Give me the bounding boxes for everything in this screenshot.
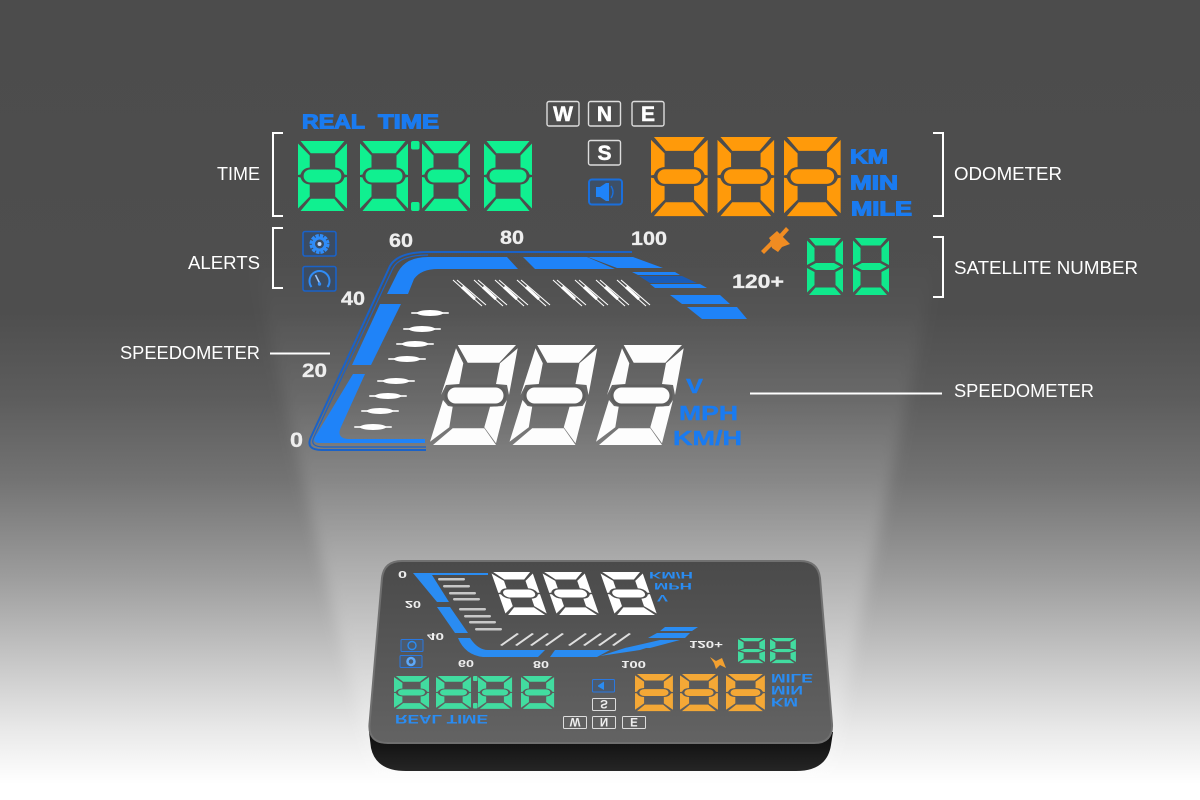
odometer units small: MIN [771, 683, 803, 695]
time digits small [394, 676, 554, 709]
speed digits small [491, 572, 657, 615]
projected light beam [250, 250, 940, 780]
scale numbers small: 40 [427, 630, 444, 642]
compass small [564, 697, 646, 728]
icon: speaker [589, 180, 622, 204]
leader line: speedometer right [750, 392, 942, 394]
speed units small: KM/H [649, 569, 693, 580]
scale numbers small: 80 [533, 658, 549, 670]
compass small: E [630, 715, 638, 727]
satellite digits [807, 238, 889, 295]
label: SPEEDOMETER right: SPEEDOMETER [954, 381, 1094, 401]
compass small: W [570, 715, 581, 727]
speed scale numbers: 0 [290, 429, 303, 452]
time digits [298, 141, 532, 211]
speed gauge arc [309, 252, 747, 450]
compass small: S [600, 697, 608, 709]
satellite icon small [710, 657, 726, 669]
alert icons small [400, 640, 423, 668]
compass: W N E S: S [597, 142, 612, 165]
label: ODOMETER: ODOMETER [954, 164, 1062, 184]
satellite digits small [738, 638, 796, 663]
compass small: N [600, 715, 608, 727]
compass: W N E S: N [597, 103, 612, 126]
compass: W N E S: E [641, 103, 655, 126]
speed scale numbers: 100 [631, 229, 667, 250]
gauge small [413, 573, 698, 657]
speed units: KM/H [673, 428, 742, 450]
horizontal tick needles [354, 310, 449, 430]
speed units: MPH [679, 403, 738, 425]
bracket: alerts [273, 228, 283, 288]
diagonal tick needles [453, 280, 650, 306]
label: SPEEDOMETER left: SPEEDOMETER [120, 343, 260, 363]
bracket: odometer [933, 133, 943, 216]
speed units small [649, 569, 693, 603]
speed units: V [686, 376, 704, 398]
REAL TIME heading: TIME [378, 112, 439, 134]
scale numbers small: 60 [458, 657, 474, 669]
odometer digits [651, 137, 841, 216]
odometer units: MIN [850, 172, 898, 194]
device face [369, 561, 832, 743]
diagonal ticks small [500, 633, 631, 646]
device body [369, 732, 833, 771]
device: HUD unit [369, 561, 833, 771]
leader line: speedometer left [270, 352, 330, 354]
speed units [673, 376, 742, 450]
compass: W N E S [547, 102, 664, 165]
icon: gear alert [303, 232, 336, 256]
scale numbers small [398, 568, 723, 670]
speed scale numbers: 60 [389, 231, 413, 252]
odometer units: MILE [851, 198, 912, 220]
odometer units small: KM [771, 695, 798, 707]
REAL TIME heading [302, 112, 439, 134]
icon: satellite [761, 227, 790, 254]
speaker icon small [592, 680, 614, 692]
bracket: time [273, 133, 283, 216]
speed scale numbers: 80 [500, 228, 524, 249]
speed scale numbers: 40 [341, 289, 365, 310]
scale numbers small: 100 [621, 658, 646, 670]
scale numbers small: 0 [398, 568, 407, 580]
HUD projection [290, 102, 912, 452]
label: SATELLITE NUMBER: SATELLITE NUMBER [954, 258, 1138, 278]
odometer units [850, 146, 912, 220]
REAL TIME small: REAL TIME [395, 712, 488, 724]
speed scale numbers: 120+ [732, 272, 784, 293]
REAL TIME heading: REAL [302, 112, 365, 134]
label: TIME: TIME [217, 164, 260, 184]
bracket: satellite number [933, 237, 943, 297]
horizontal ticks small [438, 578, 502, 630]
scale numbers small: 20 [405, 598, 421, 610]
odometer units small [771, 671, 813, 707]
icon: dial alert [303, 266, 336, 291]
speed units small: MPH [654, 580, 692, 591]
speed units small: V [657, 592, 669, 603]
speed scale numbers: 20 [302, 361, 327, 382]
speed digits [430, 345, 684, 445]
label: ALERTS: ALERTS [188, 253, 260, 273]
compass: W N E S: W [553, 103, 573, 126]
odometer units small: MILE [771, 671, 813, 683]
odometer digits small [635, 674, 765, 711]
scale numbers small: 120+ [689, 638, 723, 650]
speed scale numbers [290, 228, 784, 452]
odometer units: KM [850, 146, 888, 168]
